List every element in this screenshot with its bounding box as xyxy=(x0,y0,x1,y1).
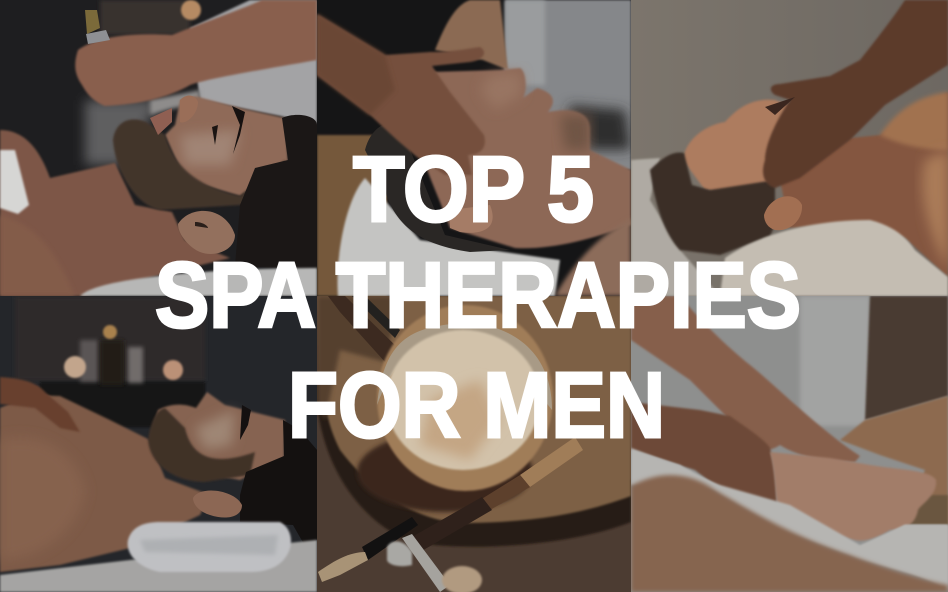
photo: foot massage xyxy=(631,296,948,592)
title line: top 5: TOP 5 xyxy=(353,137,594,241)
photo: facial massage xyxy=(317,0,631,296)
photo: shoulder massage xyxy=(0,296,317,592)
photo: man receiving oil therapy xyxy=(0,0,317,296)
title line: spa therapies: SPA THERAPIES xyxy=(155,243,801,347)
title line: for men: FOR MEN xyxy=(288,353,665,457)
title xyxy=(155,137,801,457)
photo: head massage xyxy=(631,0,948,296)
photo: scrub bowl on tray xyxy=(317,296,631,592)
